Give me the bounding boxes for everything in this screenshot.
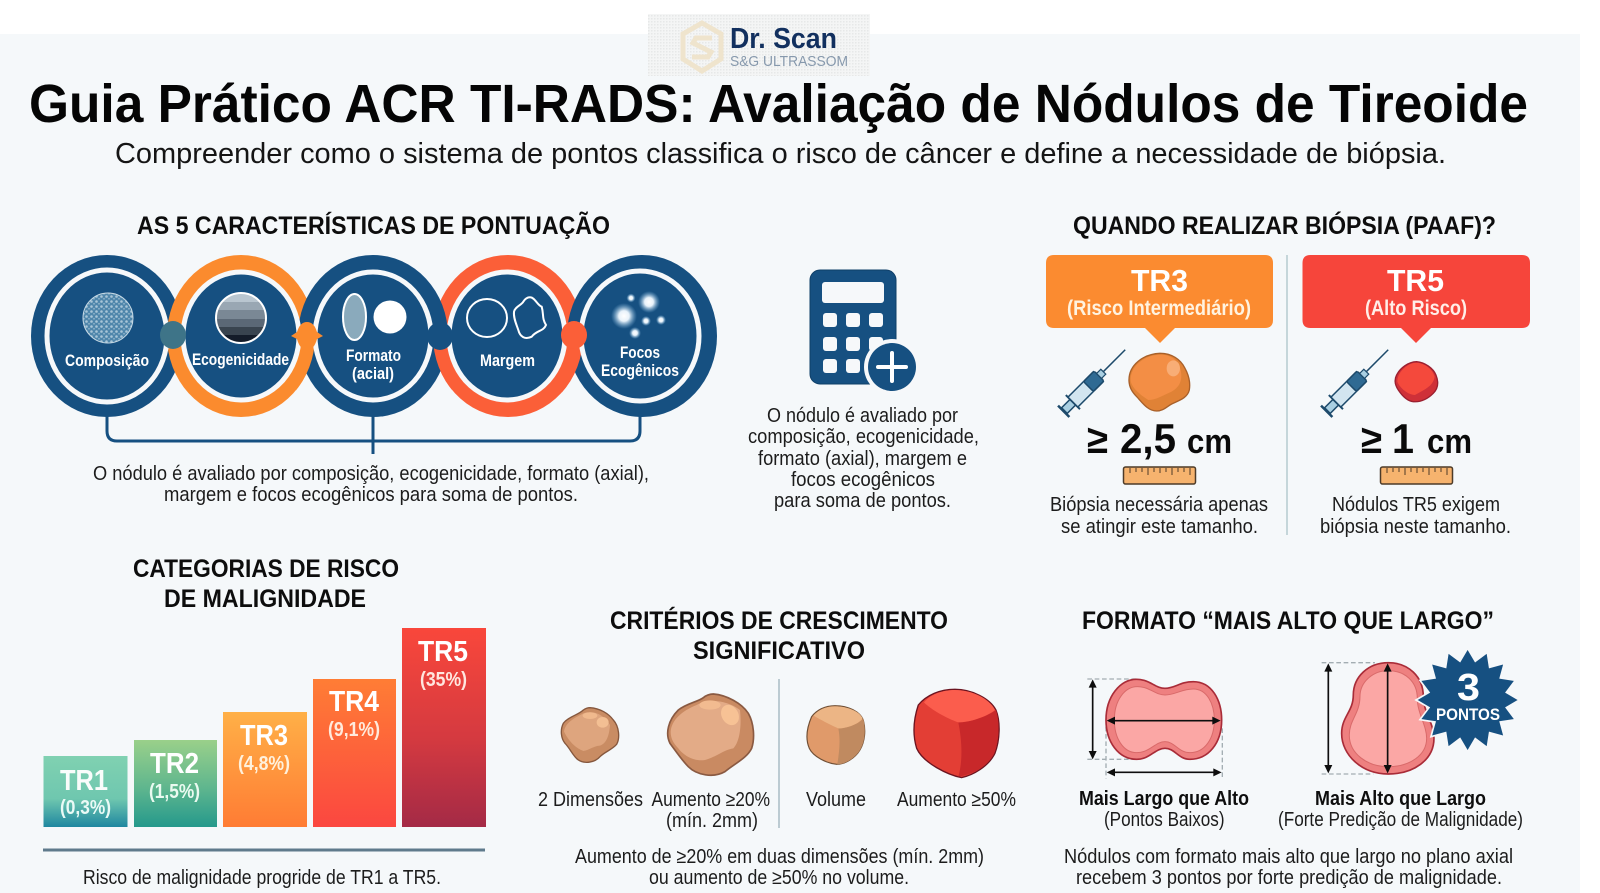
title: Guia Prático ACR TI-RADS: Avaliação de Nódulos de Tireoide	[29, 74, 1528, 134]
callout: TR3	[1046, 255, 1273, 343]
text: 1 cm threshold: ≥	[1361, 418, 1382, 462]
item: focos ecogênicos	[601, 291, 679, 380]
labels: shape captions: Mais Largo que Alto	[1079, 788, 1249, 810]
heading: categorias	[133, 555, 399, 613]
icon: ruler TR5	[1380, 467, 1452, 484]
bar TR1: (0,3%)	[60, 797, 111, 819]
text: 1 cm threshold: cm	[1427, 423, 1472, 461]
bar TR5	[402, 628, 486, 827]
divider	[1286, 255, 1288, 535]
item: ecogenicidade	[192, 293, 289, 369]
heading: categorias: DE MALIGNIDADE	[164, 585, 366, 613]
diagram: mais largo que alto	[1087, 679, 1222, 778]
bar TR3	[223, 712, 307, 827]
panel: as 5 características de pontuação	[31, 210, 717, 506]
badge: 3 pontos	[1416, 648, 1519, 752]
item: formato (acial)	[343, 294, 406, 383]
caption: formato: Nódulos com formato mais alto que largo no plano axial	[1064, 846, 1513, 868]
diagram: mais alto que largo	[1322, 663, 1434, 774]
text: TR5 note: Nódulos TR5 exigem	[1332, 494, 1500, 516]
item: ecogenicidade: Ecogenicidade	[192, 350, 289, 369]
icon: nodule 2 dimensions small	[561, 708, 619, 762]
icon: calculator	[810, 270, 920, 395]
caption: risco: Risco de malignidade progride de TR1 a TR5.	[83, 867, 441, 889]
logo: Dr. Scan	[648, 14, 870, 76]
bar TR2	[134, 740, 217, 827]
caption: crescimento	[575, 846, 984, 889]
text: TR3 note: se atingir este tamanho.	[1061, 516, 1258, 538]
axis line	[43, 848, 485, 852]
text: calculator description: formato (axial), margem e	[758, 448, 967, 470]
callout: TR5: TR5	[1387, 263, 1444, 298]
icon: syringe TR5	[1320, 343, 1395, 418]
caption: formato	[1064, 846, 1513, 889]
item: composição: Composição	[65, 351, 149, 370]
icon: nodule volume small	[807, 706, 865, 764]
panel: formato mais alto que largo	[1064, 607, 1523, 889]
caption: pontuação: O nódulo é avaliado por composição, ecogenicidade, formato (axial),	[93, 463, 649, 485]
badge: 3 pontos: PONTOS	[1436, 705, 1500, 724]
bar TR2: TR2	[150, 748, 199, 780]
logo: Dr. Scan: S&G ULTRASSOM	[730, 53, 848, 70]
bar TR2: (1,5%)	[149, 781, 200, 803]
badge: 3 pontos: 3	[1457, 667, 1480, 709]
bar TR3: (4,8%)	[238, 753, 290, 775]
bar TR5: (35%)	[420, 669, 467, 691]
bar TR4	[313, 679, 396, 827]
panel: calculator	[748, 270, 979, 512]
text: calculator description: O nódulo é avaliado por	[767, 405, 958, 427]
item: margem	[467, 297, 546, 370]
text: TR3 note: Biópsia necessária apenas	[1050, 494, 1268, 516]
text: calculator description: para soma de pontos.	[774, 490, 951, 512]
labels: shape captions: Mais Alto que Largo	[1315, 788, 1486, 810]
text: calculator description: focos ecogênicos	[791, 469, 935, 491]
labels: shape captions: (Pontos Baixos)	[1104, 809, 1224, 831]
text: TR5 note: biópsia neste tamanho.	[1320, 516, 1511, 538]
text: 2,5 cm threshold: 2,5	[1120, 415, 1176, 462]
text: calculator description: composição, ecogenicidade,	[748, 426, 979, 448]
bar TR4: (9,1%)	[328, 719, 380, 741]
icon: nodule TR3	[1129, 353, 1190, 411]
caption: crescimento: Aumento de ≥20% em duas dimensões (mín. 2mm)	[575, 846, 984, 868]
heading: formato: FORMATO “MAIS ALTO QUE LARGO”	[1082, 607, 1494, 635]
bar TR5: TR5	[418, 636, 468, 668]
panel: quando realizar biópsia	[1046, 210, 1530, 538]
labels: shape captions	[1079, 788, 1523, 831]
bracket connector	[107, 415, 640, 454]
divider	[778, 679, 780, 828]
labels: nodule captions: Volume	[806, 789, 866, 811]
bar TR1	[44, 756, 128, 827]
callout: TR3: (Risco Intermediário)	[1067, 297, 1251, 320]
text: TR3 note	[1050, 494, 1268, 538]
labels: nodule captions	[538, 789, 1016, 832]
logo: Dr. Scan: Dr. Scan	[730, 23, 837, 55]
bar TR4: TR4	[329, 686, 379, 718]
text: TR5 note	[1320, 494, 1511, 538]
heading: crescimento: SIGNIFICATIVO	[693, 637, 865, 665]
labels: nodule captions: 2 Dimensões	[538, 789, 643, 811]
callout: TR3: TR3	[1131, 263, 1188, 298]
icon: syringe TR3	[1057, 343, 1132, 418]
heading: biópsia: QUANDO REALIZAR BIÓPSIA (PAAF)?	[1073, 210, 1496, 240]
item: formato (acial): (acial)	[352, 364, 394, 383]
callout: TR5: (Alto Risco)	[1365, 297, 1467, 320]
bar TR3: TR3	[240, 720, 288, 752]
text: 1 cm threshold: 1	[1392, 415, 1414, 462]
subtitle: Compreender como o sistema de pontos classifica o risco de câncer e define a necessidade de biópsia.	[115, 138, 1446, 170]
text: 2,5 cm threshold	[1087, 415, 1232, 462]
item: formato (acial): Formato	[346, 346, 401, 365]
chain of five rings	[31, 255, 717, 417]
panel: categorias de risco	[43, 555, 486, 889]
caption: crescimento: ou aumento de ≥50% no volume.	[649, 867, 909, 889]
text: calculator description	[748, 405, 979, 512]
item: focos ecogênicos: Focos	[620, 343, 660, 362]
heading: categorias: CATEGORIAS DE RISCO	[133, 555, 399, 583]
caption: pontuação: margem e focos ecogênicos para soma de pontos.	[164, 484, 578, 506]
heading: crescimento: CRITÉRIOS DE CRESCIMENTO	[610, 606, 948, 635]
heading: características: AS 5 CARACTERÍSTICAS DE PONTUAÇÃO	[137, 210, 610, 240]
labels: nodule captions: Aumento ≥20%	[652, 789, 770, 811]
labels: nodule captions: (mín. 2mm)	[666, 810, 758, 832]
icon: nodule volume large	[914, 689, 999, 778]
text: 2,5 cm threshold: cm	[1187, 423, 1232, 461]
bar chart	[44, 628, 486, 827]
labels: shape captions: (Forte Predição de Malignidade)	[1278, 809, 1523, 831]
callout: TR5	[1302, 255, 1530, 343]
text: 1 cm threshold	[1361, 415, 1472, 462]
panel: critérios de crescimento	[538, 606, 1016, 889]
item: margem: Margem	[480, 351, 535, 370]
item: composição	[65, 293, 149, 370]
icon: nodule TR5	[1395, 362, 1438, 402]
bar TR1: TR1	[60, 765, 108, 797]
icon: ruler TR3	[1124, 467, 1196, 484]
item: focos ecogênicos: Ecogênicos	[601, 361, 679, 380]
heading: crescimento	[610, 606, 948, 665]
labels: nodule captions: Aumento ≥50%	[897, 789, 1016, 811]
text: 2,5 cm threshold: ≥	[1087, 418, 1108, 462]
caption: formato: recebem 3 pontos por forte predição de malignidade.	[1076, 867, 1502, 889]
caption: pontuação	[93, 463, 649, 506]
icon: nodule 2 dimensions large	[668, 694, 754, 775]
